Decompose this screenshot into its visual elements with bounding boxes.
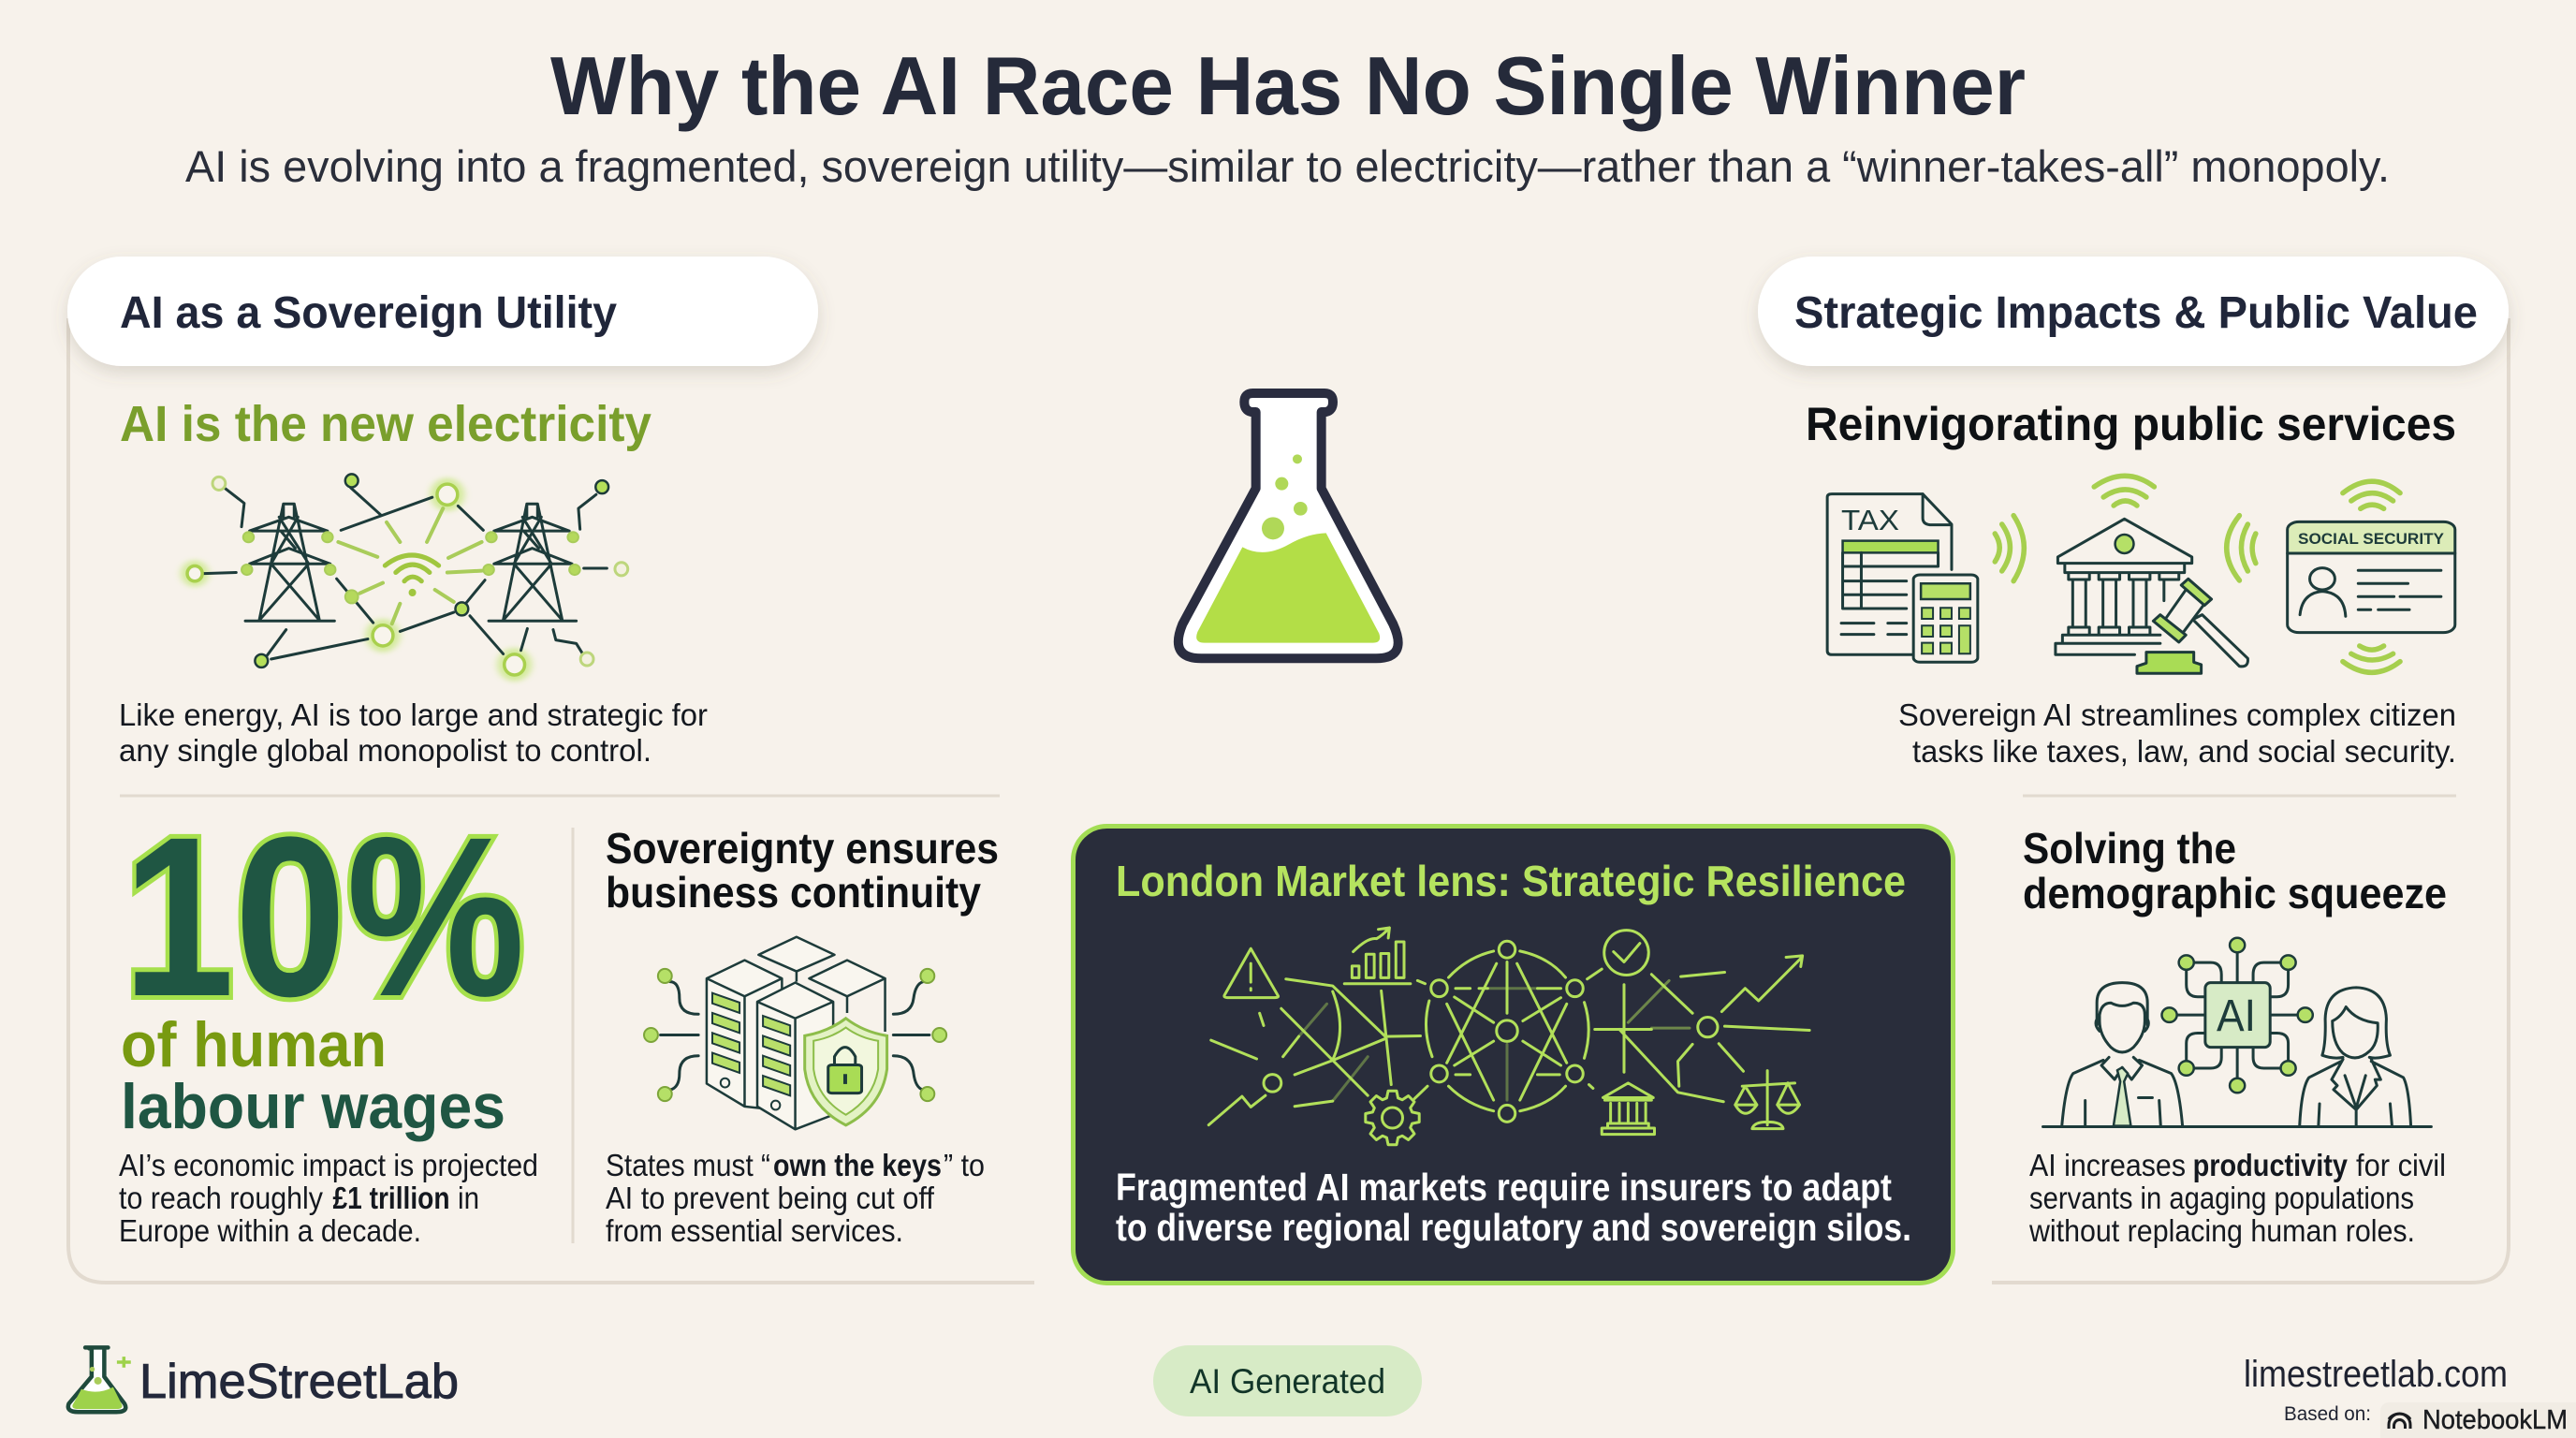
- icon: central flask: [1178, 393, 1398, 658]
- panel: Strategic Impacts and Public Value: [1758, 257, 2509, 1283]
- text: own the keys: ” to: [944, 1149, 985, 1183]
- icon: tax, law and social security: SOCIAL SECURITY: [2298, 530, 2445, 548]
- heading: Reinvigorating public services: Reinvigorating public services: [1806, 398, 2456, 450]
- text: own the keys: States must “: [606, 1149, 770, 1183]
- icon: civil servants with AI chip: [2042, 938, 2431, 1127]
- text: own the keys: own the keys: [773, 1149, 942, 1183]
- badge: AI Generated: [1153, 1345, 1422, 1416]
- right panel heading pill: Strategic Impacts & Public Value: [1794, 288, 2478, 338]
- left panel heading pill: [67, 257, 818, 366]
- text: public services description: tasks like taxes, law, and social security.: [1912, 735, 2456, 770]
- text: productivity description: for civil: [2356, 1149, 2446, 1183]
- text: fragmented AI markets: [1116, 1166, 1911, 1249]
- heading: AI is the new electricity: AI is the new electricity: [120, 396, 651, 452]
- heading: London Market lens: London Market lens: Strategic Resilience: [1116, 857, 1906, 905]
- text: public services description: Sovereign AI streamlines complex citizen: [1898, 698, 2456, 733]
- panel: AI as a Sovereign Utility: [67, 257, 1034, 1283]
- heading: Solving the demographic squeeze: Solving the: [2023, 824, 2236, 873]
- heading: Sovereignty ensures business continuity: business continuity: [606, 868, 981, 917]
- subtitle: AI is evolving into a fragmented, sovereign utility—similar to electricity—rather than a “winner-takes-all” monopoly.: [185, 141, 2390, 191]
- text: public services description: [1898, 698, 2456, 770]
- text: electricity description: [119, 698, 708, 769]
- stat: 10 percent of human labour wages: [121, 790, 525, 1142]
- heading: Sovereignty ensures business continuity: [606, 824, 999, 917]
- stat: 10 percent of human labour wages: 10%: [123, 790, 525, 1044]
- text: fragmented AI markets: Fragmented AI markets require insurers to adapt: [1116, 1166, 1892, 1209]
- icon: fragmented network with risk, chart and regulation symbols: [1208, 928, 1809, 1145]
- text: economic impact: Europe within a decade.: [119, 1214, 421, 1249]
- text: own the keys: from essential services.: [606, 1214, 903, 1249]
- text: productivity description: productivity: [2193, 1149, 2348, 1183]
- text: electricity description: any single global monopolist to control.: [119, 734, 651, 769]
- text: fragmented AI markets: to diverse regional regulatory and sovereign silos.: [1116, 1206, 1911, 1249]
- stat: 10 percent of human labour wages: labour wages: [121, 1071, 505, 1142]
- title: Why the AI Race Has No Single Winner: [550, 39, 2026, 132]
- stat: 10 percent of human labour wages: of human: [121, 1009, 387, 1080]
- text: productivity description: [2028, 1149, 2446, 1249]
- text: economic impact: £1 trillion: [333, 1181, 449, 1216]
- footer logo: LimeStreetLab: LimeStreetLab: [139, 1355, 459, 1409]
- heading: Sovereignty ensures business continuity: Sovereignty ensures: [606, 824, 999, 873]
- heading: Solving the demographic squeeze: [2023, 824, 2447, 917]
- icon: secure servers with shield: [644, 937, 946, 1129]
- text: own the keys: AI to prevent being cut off: [606, 1181, 935, 1216]
- text: productivity description: without replacing human roles.: [2028, 1214, 2415, 1249]
- badge: AI Generated: AI Generated: [1190, 1362, 1385, 1401]
- text: productivity description: AI increases: [2029, 1149, 2186, 1183]
- icon: civil servants with AI chip: AI: [2217, 991, 2256, 1041]
- text: own the keys: [606, 1149, 985, 1249]
- text: productivity description: servants in agaging populations: [2029, 1181, 2414, 1216]
- text: economic impact: AI’s economic impact is projected: [119, 1149, 538, 1183]
- NotebookLM badge: [2380, 1402, 2576, 1438]
- NotebookLM badge: NotebookLM: [2422, 1405, 2568, 1435]
- footer logo: LimeStreetLab: [68, 1347, 459, 1412]
- panel: London Market lens: [1073, 826, 1953, 1283]
- text: economic impact: [119, 1149, 538, 1249]
- text: economic impact: in: [458, 1181, 479, 1216]
- icon: tax, law and social security: TAX: [1841, 504, 1899, 536]
- footer source note: Based on:: [2284, 1403, 2371, 1425]
- right panel heading pill: [1758, 257, 2509, 366]
- heading: Solving the demographic squeeze: demographic squeeze: [2023, 869, 2447, 917]
- footer link: limestreetlab.com: limestreetlab.com: [2244, 1354, 2508, 1395]
- icon: power pylons and network: [181, 474, 628, 682]
- text: electricity description: Like energy, AI is too large and strategic for: [119, 698, 708, 733]
- icon: tax, law and social security: [1827, 476, 2455, 673]
- left panel heading pill: AI as a Sovereign Utility: [120, 288, 617, 338]
- text: economic impact: to reach roughly: [119, 1181, 323, 1216]
